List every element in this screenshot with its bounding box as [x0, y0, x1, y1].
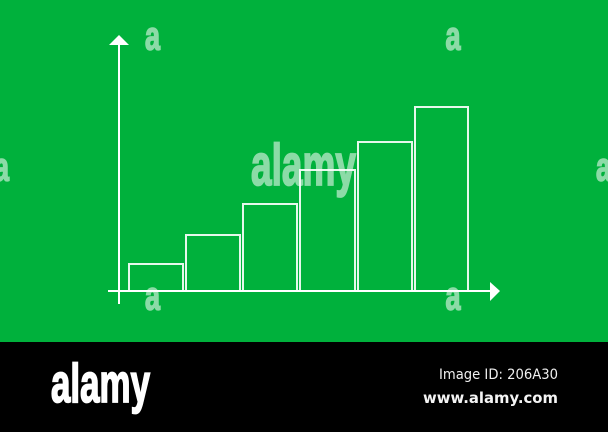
panel: black footer — [0, 342, 608, 432]
bar chart — [129, 107, 468, 291]
image id text: Image ID: 206A30 — [439, 367, 558, 383]
watermark: centre logo: alamy — [251, 133, 356, 198]
panel: green background — [0, 0, 608, 342]
watermark: repeated letters: a — [446, 14, 461, 58]
watermark: repeated letters: a — [145, 14, 161, 58]
arrow: vertical axis — [109, 35, 129, 304]
bar 3 — [243, 204, 297, 291]
watermark: repeated letters: a — [446, 274, 461, 318]
bar 5 — [358, 142, 412, 291]
footer logo: alamy — [51, 352, 150, 414]
bar 4 — [300, 170, 355, 291]
website url: www.alamy.com — [423, 389, 558, 407]
bar 1 — [129, 264, 183, 291]
watermark: repeated letters — [0, 14, 608, 318]
arrow: horizontal axis — [108, 282, 500, 301]
bar 2 — [186, 235, 240, 291]
watermark: repeated letters: a — [145, 274, 161, 318]
bar 6 — [415, 107, 468, 291]
